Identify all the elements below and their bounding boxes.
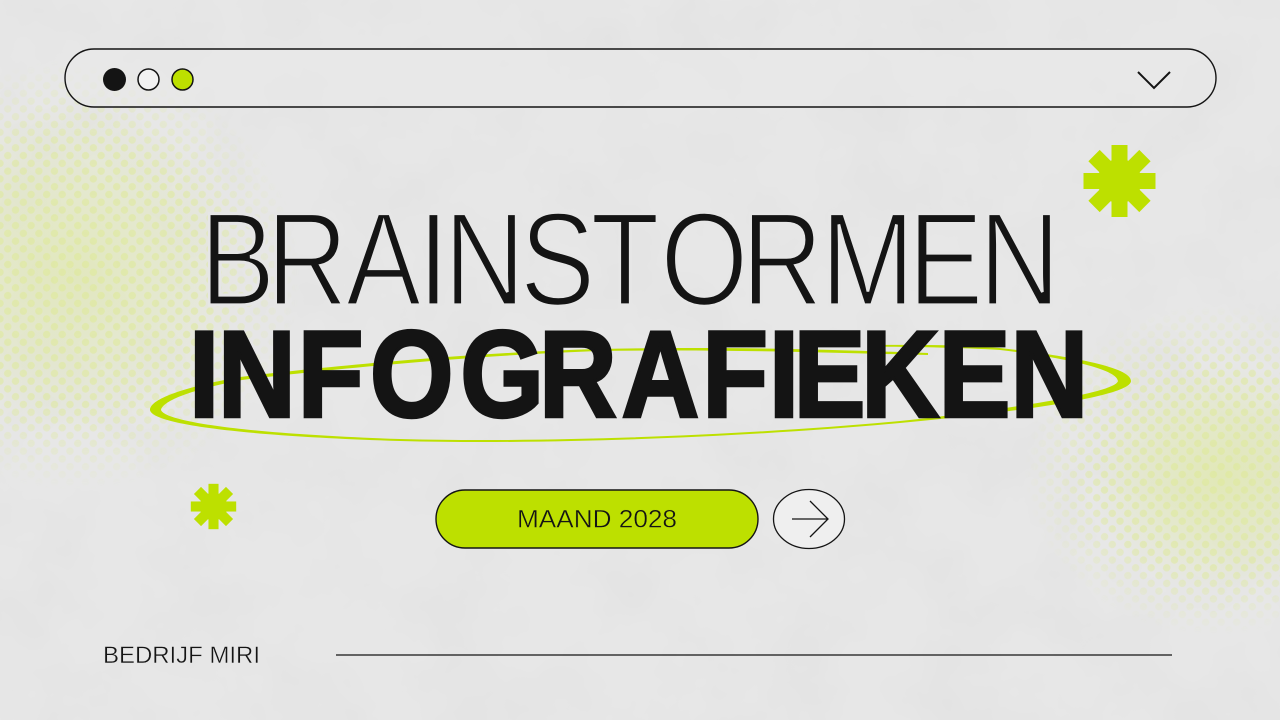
date pill <box>436 490 758 548</box>
icon: chevron down <box>1138 72 1170 88</box>
window dot white <box>138 69 159 90</box>
company name: BEDRIJF MIRI <box>103 642 260 669</box>
title line one: BRAINSTORMEN <box>200 185 1060 334</box>
halftone glow right <box>1040 318 1280 622</box>
arrow button <box>774 490 844 548</box>
halftone glow left <box>0 77 278 474</box>
icon: arrow right <box>792 501 828 537</box>
top browser bar <box>65 49 1216 107</box>
window dot green <box>172 69 193 90</box>
date label: MAAND 2028 <box>517 506 677 534</box>
icon: small green asterisk <box>191 484 236 529</box>
icon: large green asterisk <box>1084 145 1156 217</box>
title line two: INFOGRAFIEKEN <box>189 306 1088 443</box>
window dot black <box>103 68 126 91</box>
green hand drawn ellipse <box>150 345 1131 442</box>
